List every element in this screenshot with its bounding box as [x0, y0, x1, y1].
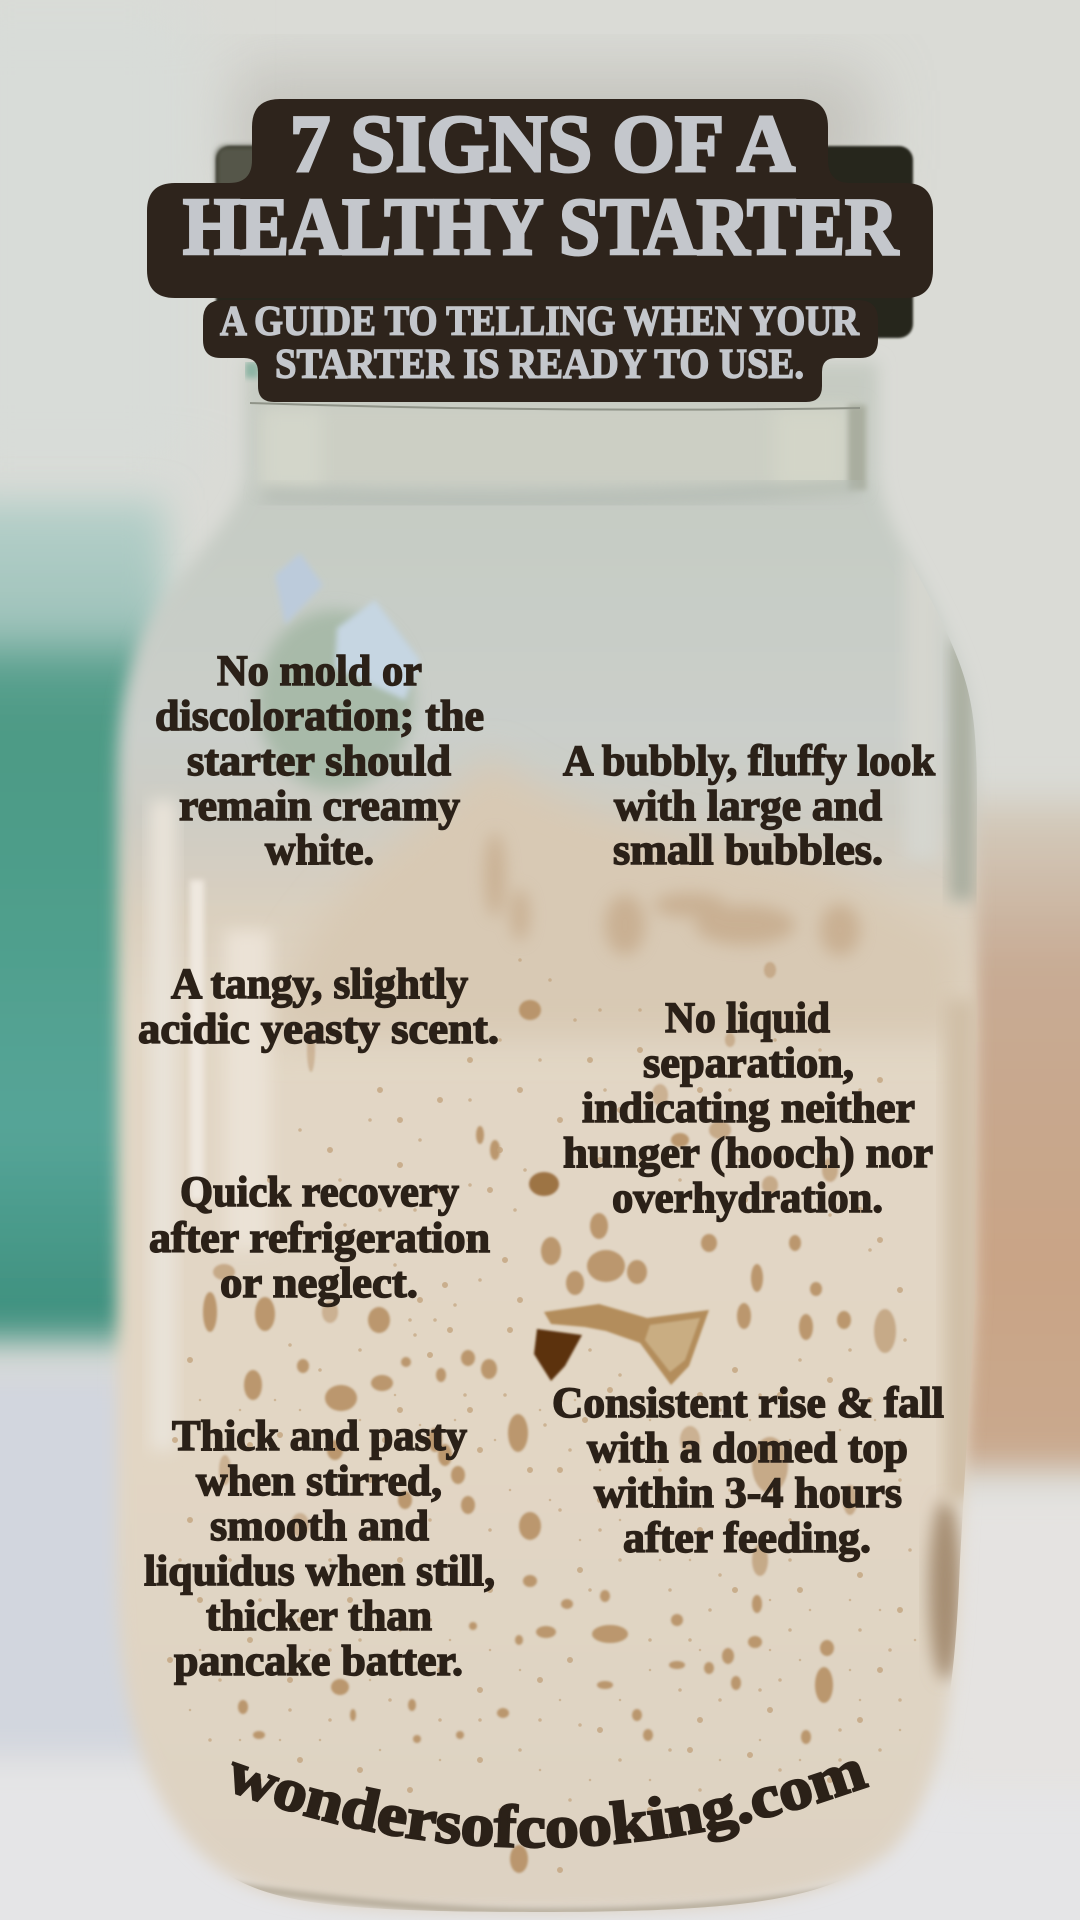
- subtitle line 1: A GUIDE TO TELLING WHEN YOUR: [220, 299, 860, 345]
- sign: thick and pasty: pancake batter.: [174, 1637, 463, 1685]
- starter foam: [260, 755, 970, 1040]
- sign: no mold: white.: [265, 826, 374, 874]
- sign: bubbly look: [563, 737, 936, 874]
- sign: no mold: remain creamy: [179, 782, 460, 830]
- title line 1: 7 SIGNS OF A: [290, 98, 795, 189]
- sign: no mold: [155, 647, 484, 874]
- title banner: [147, 98, 933, 298]
- title line 2: HEALTHY STARTER: [183, 181, 899, 272]
- subtitle line 2: STARTER IS READY TO USE.: [275, 342, 804, 388]
- sign: thick and pasty: smooth and: [210, 1502, 429, 1550]
- sign: quick recovery: Quick recovery: [180, 1168, 459, 1216]
- foam streaks: [485, 833, 860, 956]
- sign: thick and pasty: thicker than: [206, 1592, 432, 1640]
- sign: tangy scent: [138, 960, 499, 1053]
- sign: bubbly look: A bubbly, fluffy look: [563, 737, 936, 785]
- sign: no liquid separation: overhydration.: [612, 1174, 883, 1222]
- subtitle banner: [203, 299, 878, 402]
- large sunken bubble: [534, 1304, 709, 1385]
- neck band: [245, 362, 866, 501]
- sign: consistent rise and fall: [552, 1379, 944, 1562]
- sign: bubbly look: small bubbles.: [613, 826, 883, 874]
- sign: no liquid separation: No liquid: [665, 994, 830, 1042]
- sign: bubbly look: with large and: [614, 782, 882, 830]
- sign: quick recovery: after refrigeration: [149, 1214, 490, 1262]
- website on curved baseline: wondersofcooking.com: [231, 1761, 870, 1849]
- sign: consistent rise and fall: with a domed top: [587, 1424, 908, 1472]
- sign: quick recovery: [149, 1168, 490, 1307]
- sign: consistent rise and fall: Consistent rise & fall: [552, 1379, 944, 1427]
- large bubbles in starter: [203, 962, 896, 1873]
- sign: no liquid separation: hunger (hooch) nor: [563, 1129, 933, 1177]
- glass jar with starter: [117, 362, 977, 1912]
- small bubbles in starter: [170, 960, 915, 1870]
- jar lid: [216, 146, 913, 338]
- window reflection: [257, 553, 420, 790]
- sign: no mold: starter should: [187, 737, 451, 785]
- glass highlights: [150, 560, 975, 1912]
- sign: thick and pasty: when stirred,: [196, 1457, 442, 1505]
- sign: no liquid separation: separation,: [643, 1039, 854, 1087]
- sign: no liquid separation: indicating neither: [582, 1084, 915, 1132]
- sign: consistent rise and fall: after feeding.: [623, 1514, 871, 1562]
- sign: no mold: No mold or: [217, 647, 422, 695]
- sign: thick and pasty: liquidus when still,: [144, 1547, 495, 1595]
- sign: tangy scent: acidic yeasty scent.: [138, 1005, 499, 1053]
- sign: consistent rise and fall: within 3-4 hours: [594, 1469, 902, 1517]
- sign: no liquid separation: [563, 994, 933, 1222]
- sign: quick recovery: or neglect.: [220, 1259, 418, 1307]
- sign: thick and pasty: Thick and pasty: [172, 1412, 467, 1460]
- sign: tangy scent: A tangy, slightly: [171, 960, 468, 1008]
- sign: thick and pasty: [144, 1412, 495, 1685]
- sign: no mold: discoloration; the: [155, 692, 484, 740]
